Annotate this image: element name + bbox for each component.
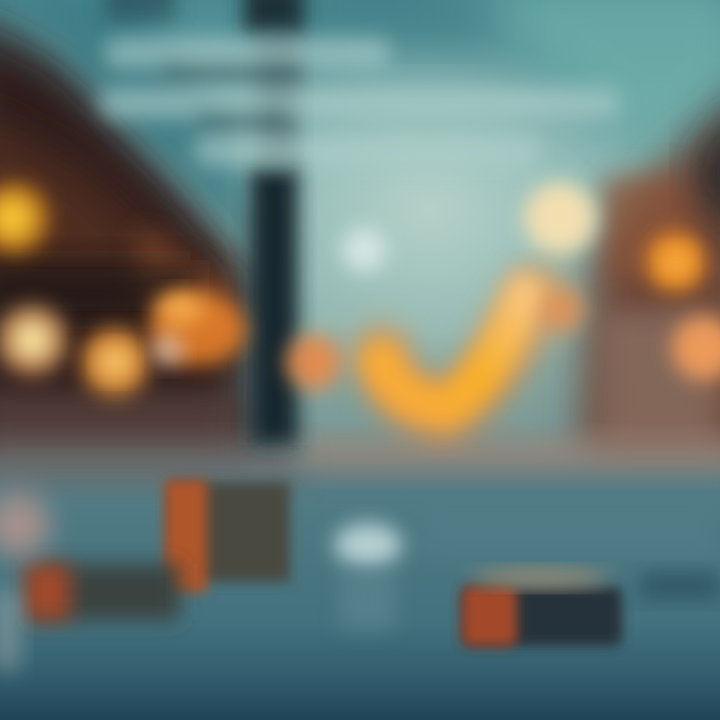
lamp post	[105, 0, 304, 445]
glowing lights, left	[0, 182, 246, 396]
left foreground boxes	[0, 480, 290, 670]
centre glass highlight	[334, 523, 402, 630]
ground	[0, 438, 720, 720]
left building	[0, 0, 255, 470]
sky background	[0, 0, 720, 500]
right foreground box	[462, 569, 622, 646]
orange check shape	[382, 288, 584, 412]
right building	[580, 90, 720, 460]
glowing lights, centre and right	[286, 182, 720, 390]
blurred headline bands	[100, 38, 620, 166]
